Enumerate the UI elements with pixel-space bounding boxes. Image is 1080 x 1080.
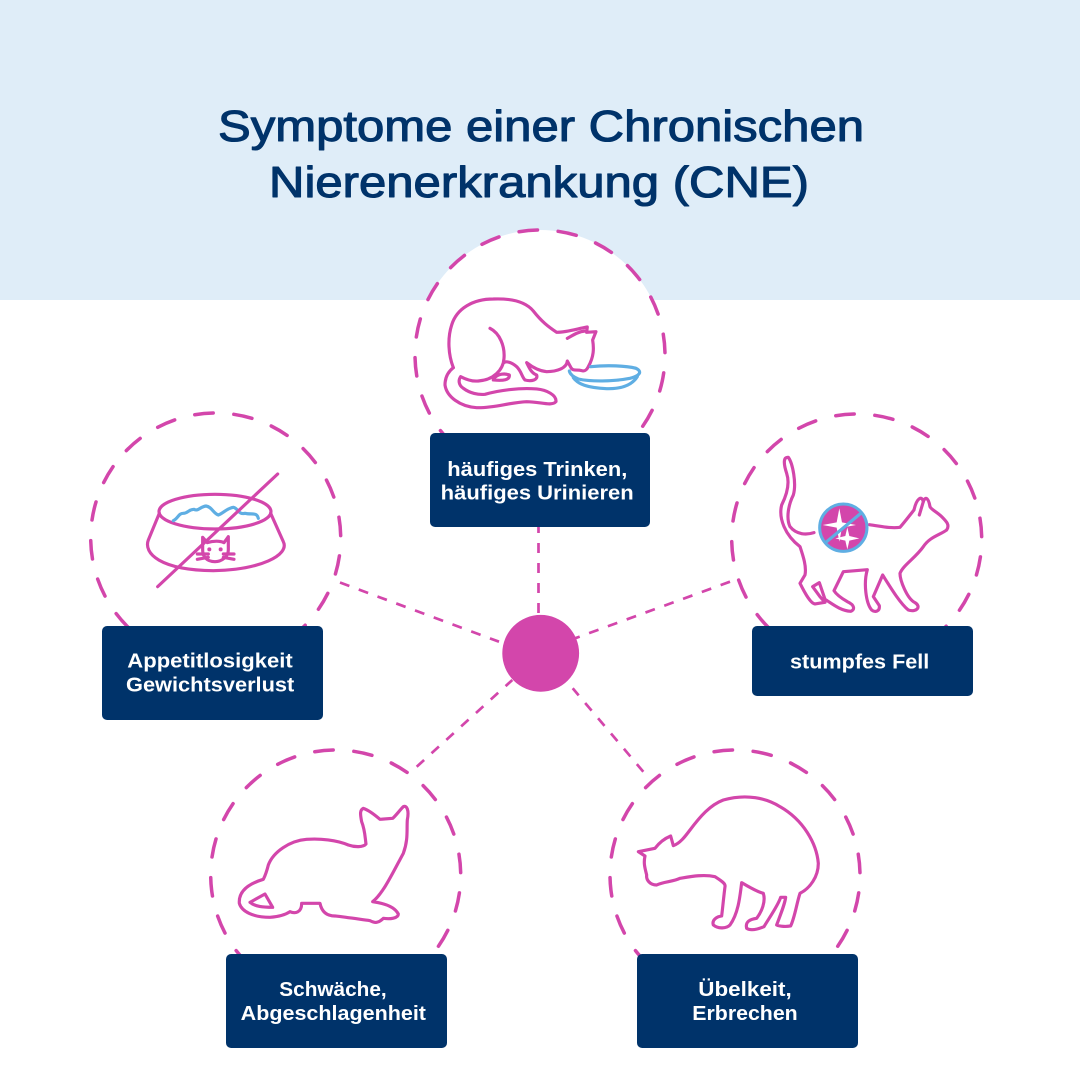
- label: Appetitlosigkeit: [127, 651, 293, 673]
- icon: food bowl crossed out: [147, 474, 284, 587]
- label: [752, 626, 973, 696]
- label: häufiges Urinieren: [441, 482, 634, 504]
- panel: haeufiges Trinken: [415, 230, 665, 527]
- connector lines: [340, 523, 730, 772]
- icon: cat drinking: [445, 299, 640, 408]
- icon: hunched cat: [638, 797, 818, 930]
- icon: cat with dull fur: [781, 457, 948, 611]
- header band: [0, 0, 1080, 300]
- label: stumpfes Fell: [790, 652, 929, 674]
- icon: lying cat: [239, 806, 408, 922]
- label: häufiges Trinken,: [447, 459, 627, 481]
- label: [226, 954, 447, 1048]
- label: Schwäche,: [279, 979, 387, 1001]
- label: [637, 954, 858, 1048]
- label: Gewichtsverlust: [126, 675, 295, 697]
- label: Abgeschlagenheit: [241, 1003, 426, 1025]
- title: Nierenerkrankung (CNE): [269, 158, 809, 207]
- panel: Uebelkeit: [610, 750, 860, 1048]
- label: Übelkeit,: [698, 978, 792, 1001]
- panel: stumpfes Fell: [732, 414, 982, 696]
- label: Erbrechen: [692, 1003, 798, 1025]
- panel: Appetitlosigkeit: [91, 413, 341, 720]
- title: Symptome einer Chronischen: [218, 102, 864, 151]
- label: [102, 626, 323, 720]
- title: [218, 102, 864, 207]
- label: [430, 433, 650, 527]
- center dot: [502, 615, 579, 692]
- panel: Schwaeche: [211, 750, 461, 1048]
